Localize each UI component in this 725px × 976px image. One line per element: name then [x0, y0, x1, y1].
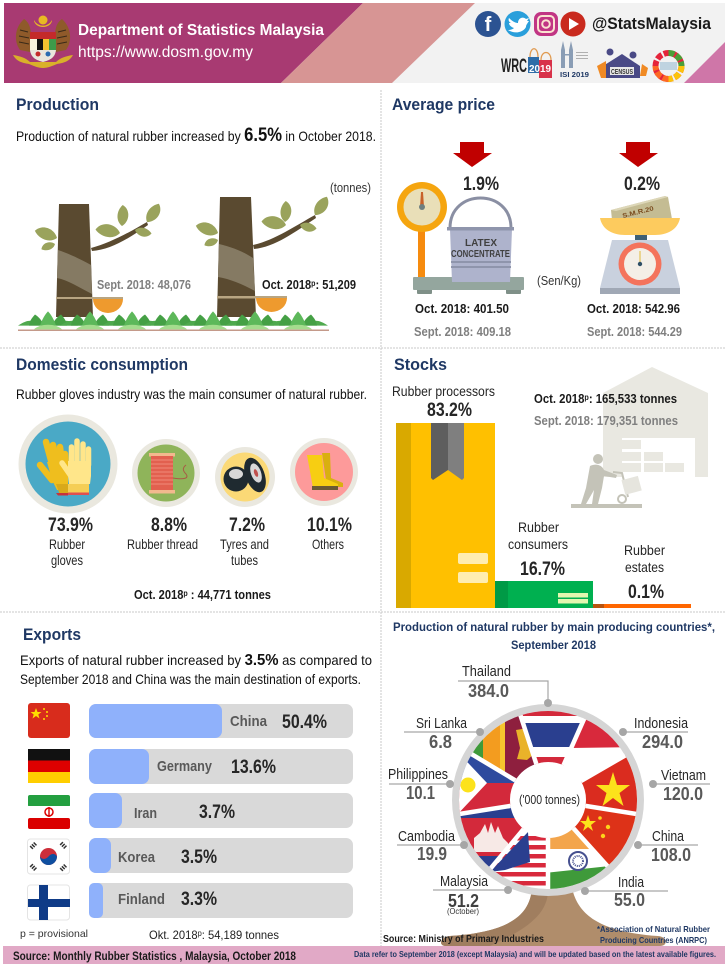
latex October price: Oct. 2018: 401.50 — [415, 302, 509, 316]
callout: Indonesia: 294.0 — [642, 732, 683, 752]
heading: average price: Average price — [392, 95, 495, 114]
consumption summary text: Rubber gloves industry was the main consumer of natural rubber. — [16, 386, 367, 402]
icon: warehouse and worker — [571, 367, 708, 508]
icon: rubber tree October — [194, 195, 333, 317]
October production value: Oct. 2018 — [262, 278, 318, 292]
department name: Department of Statistics Malaysia — [78, 22, 324, 39]
value: others: 10.1% — [307, 515, 352, 536]
bar: Korea — [89, 838, 353, 873]
SMR September price: Sept. 2018: 544.29 — [587, 325, 682, 339]
website: https://www.dosm.gov.my — [78, 44, 253, 61]
bar: China — [89, 704, 353, 738]
icon: down arrow SMR — [619, 142, 658, 167]
October production value: p — [311, 279, 316, 288]
panel: producing countries — [383, 620, 715, 946]
bar: Iran: 3.7% — [199, 802, 235, 823]
callout: Vietnam: 120.0 — [663, 784, 703, 804]
callout: Philippines — [388, 766, 454, 803]
label: tyres: Tyres and — [220, 536, 269, 552]
SMR price change: 0.2% — [624, 174, 660, 195]
centre unit label: ('000 tonnes) — [519, 792, 580, 807]
callout: Malaysia: 51.2 — [448, 891, 479, 911]
footer source: Source: Monthly Rubber Statistics , Malaysia, October 2018 — [13, 949, 296, 963]
callout: Indonesia — [619, 715, 689, 752]
panel: stocks — [392, 355, 708, 608]
icon: rubber gloves — [18, 414, 118, 514]
bar: rubber estates — [593, 604, 691, 608]
callout: China: China — [652, 828, 685, 845]
bar: China: 50.4% — [282, 712, 327, 733]
SMR October price: Oct. 2018: 542.96 — [587, 302, 680, 316]
icon: Malaysian coat of arms — [13, 16, 73, 68]
consumption total: : 44,771 tonnes — [188, 588, 271, 602]
unit label: (tonnes) — [330, 181, 371, 195]
panel: average price — [392, 95, 682, 339]
exports total: : 54,189 tonnes — [202, 928, 279, 942]
heading: stocks: Stocks — [394, 355, 447, 374]
icon: youtube — [560, 12, 586, 36]
callout: Thailand: 384.0 — [468, 681, 509, 701]
latex price change: 1.9% — [463, 174, 499, 195]
callout: India: 55.0 — [614, 890, 645, 910]
icon: instagram — [534, 12, 558, 36]
callout: India — [581, 874, 668, 910]
icon: grass strip — [18, 311, 329, 331]
value: thread: 8.8% — [151, 515, 187, 536]
source note: Source: Ministry of Primary Industries — [383, 933, 544, 945]
icon: facebook: f — [485, 14, 492, 36]
label: tyres second line: tubes — [231, 552, 258, 568]
callout: Indonesia: Indonesia — [634, 715, 689, 732]
callout: Cambodia: Cambodia — [398, 828, 456, 845]
callout: Vietnam: Vietnam — [661, 767, 706, 784]
bar: Finland — [89, 883, 353, 918]
heading: production: Production — [16, 95, 99, 114]
flag: Iran — [28, 795, 70, 829]
icon: rubber thread spool — [132, 439, 200, 507]
bucket label line two: CONCENTRATE — [451, 249, 510, 260]
value: consumers: 16.7% — [520, 559, 565, 580]
icon: tyres — [215, 447, 275, 507]
label: consumers: Rubber — [518, 519, 559, 535]
bar: Germany: Germany — [157, 758, 213, 775]
callout: Malaysia — [433, 873, 512, 916]
icon: down arrow latex — [453, 142, 492, 167]
stocks October value: p — [584, 393, 589, 402]
callout: Malaysia: (October) — [447, 907, 479, 916]
logo: census — [597, 48, 648, 78]
logo: WRC 2019: 2019 — [529, 64, 551, 75]
wedge: Vietnam — [581, 756, 637, 814]
logo: WRC 2019: WRC — [501, 56, 527, 77]
bar: Germany: 13.6% — [231, 757, 276, 778]
label: others: Others — [312, 536, 344, 552]
ANRPC note line two: Producing Countries (ANRPC) — [600, 935, 707, 945]
flag: Finland — [28, 885, 70, 920]
callout: Sri Lanka — [404, 715, 484, 752]
stocks October value: : 165,533 tonnes — [589, 392, 677, 406]
callout: Philippines: Philippines — [388, 766, 448, 783]
bar: rubber processors — [396, 423, 495, 608]
label: gloves second line: gloves — [51, 552, 83, 568]
label: consumers second line: consumers — [508, 536, 568, 552]
value: processors: 83.2% — [427, 400, 472, 421]
exports summary line one: Exports of natural rubber increased by 3.5% as compared to — [20, 652, 372, 669]
bar: China: China — [230, 713, 268, 730]
icon: kitchen scale with SMR block — [600, 196, 680, 294]
October production value: : 51,209 — [315, 278, 356, 292]
stocks October value: Oct. 2018 — [534, 392, 590, 406]
September production value: Sept. 2018: 48,076 — [97, 278, 191, 292]
bar: Iran — [89, 793, 353, 828]
label: gloves: Rubber — [49, 536, 85, 552]
chart title line two: September 2018 — [511, 638, 596, 652]
bar: Germany — [89, 749, 353, 784]
icon: facebook — [475, 11, 501, 37]
panel: domestic consumption — [16, 355, 367, 602]
icon: twitter — [504, 11, 530, 37]
unit label: (Sen/Kg) — [537, 273, 581, 288]
callout: Sri Lanka: Sri Lanka — [416, 715, 468, 732]
chart title line one: Production of natural rubber by main producing countries*, — [393, 620, 715, 634]
stocks September value: Sept. 2018: 179,351 tonnes — [534, 414, 678, 428]
latex September price: Sept. 2018: 409.18 — [414, 325, 511, 339]
logo: WRC 2019 — [501, 49, 552, 78]
bar: Iran: Iran — [134, 805, 157, 822]
callout: Thailand: Thailand — [462, 663, 511, 680]
logo: ISI 2019: ISI 2019 — [560, 72, 589, 79]
callout: Sri Lanka: 6.8 — [429, 732, 452, 752]
exports total: Okt. 2018 — [149, 928, 201, 942]
exports summary line two: September 2018 and China was the main destination of exports. — [20, 671, 361, 687]
label: processors: Rubber processors — [392, 383, 495, 399]
wedge: Malaysia — [492, 832, 548, 886]
icon: weighing scale with latex bucket — [397, 182, 524, 294]
ANRPC note line one: *Association of Natural Rubber — [597, 924, 711, 934]
provisional note: p = provisional — [20, 928, 88, 940]
heading: domestic consumption: Domestic consumption — [16, 355, 188, 374]
wedge: Cambodia — [460, 806, 524, 868]
callout: Philippines: 10.1 — [406, 783, 435, 803]
wedge: Sri Lanka — [472, 715, 536, 780]
callout: Vietnam — [649, 767, 710, 804]
social handle: @StatsMalaysia — [592, 14, 711, 33]
label: estates second line: estates — [625, 559, 664, 575]
wedge: Indonesia — [574, 718, 620, 748]
label: estates: Rubber — [624, 542, 665, 558]
bar: rubber consumers — [495, 581, 593, 608]
label: thread: Rubber thread — [127, 536, 198, 552]
icon: rubber tree September — [33, 202, 165, 317]
wedge: Thailand — [520, 711, 580, 766]
callout: China — [634, 828, 698, 865]
panel: production — [16, 95, 376, 331]
production summary text: Production of natural rubber increased by 6.5% in October 2018. — [16, 125, 376, 146]
bar: Finland: Finland — [118, 891, 165, 908]
panel: exports — [20, 625, 372, 942]
flag: Korea — [28, 839, 70, 874]
footer bar — [3, 946, 725, 964]
value: tyres: 7.2% — [229, 515, 265, 536]
callout: Cambodia: 19.9 — [417, 844, 447, 864]
stand — [441, 888, 666, 946]
bar: Korea: Korea — [118, 849, 156, 866]
value: gloves: 73.9% — [48, 515, 93, 536]
logo: ISI 2019 — [560, 41, 589, 79]
icon: rubber boots — [290, 438, 358, 506]
consumption total: Oct. 2018 — [134, 588, 190, 602]
logo: SDG wheel — [656, 53, 682, 79]
callout: Cambodia — [397, 828, 468, 864]
wedge: Philippines — [459, 754, 516, 814]
wedge: India — [548, 828, 608, 889]
icon: kitchen scale with SMR block: S.M.R.20 — [622, 205, 655, 220]
value: estates: 0.1% — [628, 582, 664, 603]
callout: India: India — [618, 874, 645, 891]
header banner — [4, 3, 725, 83]
bar: Finland: 3.3% — [181, 889, 217, 910]
flag: Germany — [28, 749, 70, 783]
callout: China: 108.0 — [651, 845, 691, 865]
consumption total: p — [183, 589, 188, 598]
callout: Thailand — [458, 663, 552, 707]
flag: China — [28, 703, 70, 738]
bar: Korea: 3.5% — [181, 847, 217, 868]
callout: Malaysia: Malaysia — [440, 873, 489, 890]
exports total: p — [198, 929, 202, 938]
wedge: China — [574, 806, 636, 866]
logo: census: CENSUS — [611, 69, 633, 76]
flag wheel — [455, 700, 645, 892]
heading: exports: Exports — [23, 625, 81, 644]
bucket label: LATEX — [465, 238, 497, 249]
